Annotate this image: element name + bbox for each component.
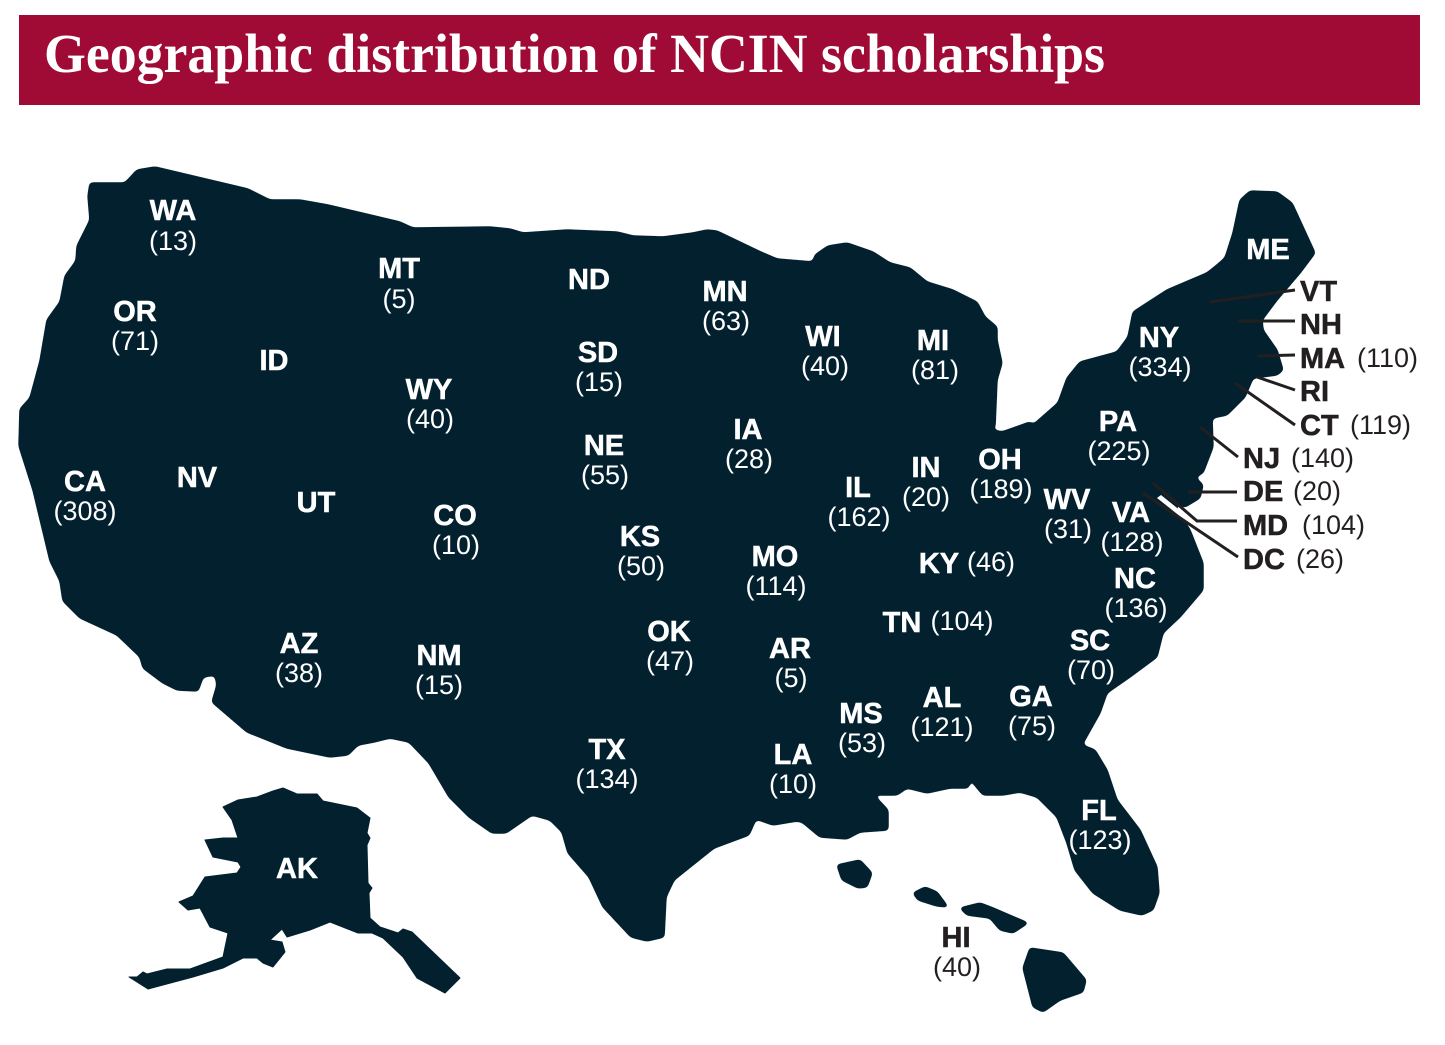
title banner: Geographic distribution of NCIN scholarships: [44, 23, 1105, 84]
label: KY: (46): [967, 547, 1015, 577]
label: LA: (10): [769, 769, 817, 799]
label: DE: (20): [1293, 476, 1341, 506]
label: MT: [378, 253, 420, 314]
label: NV: NV: [177, 462, 218, 494]
label: VA: (128): [1100, 527, 1164, 557]
label: NY: NY: [1139, 322, 1179, 354]
label: NC: [1104, 563, 1168, 623]
label: AR: AR: [769, 633, 811, 665]
label: GA: (75): [1008, 711, 1056, 741]
label: NM: NM: [416, 640, 462, 672]
label: MN: MN: [702, 276, 748, 308]
label: TN: [883, 606, 994, 639]
label: WY: (40): [406, 404, 454, 434]
label: WY: WY: [406, 374, 452, 406]
label: OR: OR: [113, 296, 157, 328]
label: IL: [827, 472, 891, 532]
label: WV: WV: [1044, 484, 1091, 516]
label: SD: SD: [578, 337, 618, 369]
label: AR: (5): [774, 663, 808, 693]
label: GA: GA: [1009, 681, 1053, 713]
map: contiguous United States: [19, 167, 1315, 941]
label: MA: MA: [1300, 343, 1345, 375]
label: NC: NC: [1114, 563, 1156, 595]
label: MI: (81): [911, 355, 959, 385]
label: RI: RI: [1300, 376, 1329, 408]
label: ME: ME: [1246, 234, 1290, 266]
label: FL: [1068, 795, 1132, 855]
label: MI: [911, 325, 959, 385]
label: OK: OK: [647, 616, 691, 648]
label: WI: WI: [805, 321, 841, 353]
label: IL: IL: [845, 472, 871, 504]
label: CO: CO: [433, 500, 477, 532]
label: DC: [1243, 544, 1344, 576]
label: OH: [969, 444, 1033, 504]
label: AR: [769, 633, 811, 693]
label: MI: MI: [917, 325, 949, 357]
label: KS: (50): [617, 551, 665, 581]
label: NE: (55): [581, 460, 629, 490]
label: DC: (26): [1296, 544, 1344, 574]
label: NJ: (140): [1291, 443, 1354, 473]
label: AL: (121): [910, 712, 974, 742]
label: NM: (15): [415, 670, 463, 700]
label: MS: [838, 698, 886, 758]
label: PA: PA: [1099, 406, 1137, 438]
label: HI: (40): [933, 952, 981, 982]
label: MS: MS: [839, 698, 883, 730]
label: IA: IA: [734, 414, 763, 446]
label: FL: (123): [1068, 825, 1132, 855]
label: ND: ND: [568, 264, 610, 296]
label: TN: (104): [930, 606, 994, 636]
label: AK: AK: [276, 853, 318, 885]
label: MN: (63): [702, 306, 750, 336]
label: WI: [801, 321, 849, 381]
label: WV: (31): [1044, 514, 1092, 544]
label: VA: [1100, 497, 1164, 557]
label: WA: (13): [149, 226, 197, 256]
label: IN: [902, 452, 950, 512]
label: CA: [53, 466, 117, 526]
label: MD: MD: [1243, 510, 1288, 542]
label: CT: (119): [1350, 410, 1411, 440]
label: KS: KS: [620, 521, 660, 553]
label: ID: ID: [260, 345, 288, 377]
label: MN: [702, 276, 750, 336]
label: OR: [111, 296, 159, 356]
label: IN: (20): [902, 482, 950, 512]
label: AZ: AZ: [280, 628, 318, 660]
label: MA: (110): [1357, 343, 1418, 373]
label: CA: (308): [53, 496, 117, 526]
label: WA: WA: [150, 195, 196, 227]
label: SD: [575, 337, 623, 397]
label: FL: FL: [1081, 795, 1117, 827]
label: MD: (104): [1302, 510, 1365, 540]
label: IL: (162): [827, 502, 891, 532]
label: NE: NE: [584, 430, 624, 462]
label: TX: (134): [575, 764, 639, 794]
label: NY: [1128, 322, 1192, 382]
label: WV: [1044, 484, 1092, 544]
label: SC: [1067, 625, 1115, 685]
label: AL: [910, 682, 974, 742]
label: OH: OH: [978, 444, 1022, 476]
label: IA: (28): [725, 444, 773, 474]
label: CT: [1300, 410, 1411, 442]
label: WA: [149, 195, 197, 256]
label: MO: [745, 541, 807, 601]
label: KY: KY: [919, 548, 959, 580]
label: WY: [406, 374, 454, 434]
label: NJ: [1243, 443, 1354, 475]
label: HI: [933, 922, 981, 982]
label: MA: [1300, 343, 1418, 375]
label: DE: [1243, 476, 1341, 508]
label: LA: [769, 739, 817, 799]
label: OK: (47): [646, 646, 694, 676]
label: GA: [1008, 681, 1056, 741]
label: IA: [725, 414, 773, 474]
label: KS: [617, 521, 665, 581]
label: NJ: NJ: [1243, 443, 1280, 475]
label: MT: (5): [382, 284, 416, 314]
label: DE: DE: [1243, 476, 1283, 508]
label: OH: (189): [969, 474, 1033, 504]
label: VA: VA: [1112, 497, 1150, 529]
label: NE: [581, 430, 629, 490]
label: WI: (40): [801, 351, 849, 381]
label: SD: (15): [575, 367, 623, 397]
label: DC: DC: [1243, 544, 1285, 576]
map: Alaska: [129, 788, 460, 993]
label: AZ: (38): [275, 658, 323, 688]
label: MS: (53): [838, 728, 886, 758]
icon: Chesapeake Bay gap: [1157, 495, 1197, 525]
label: IN: IN: [912, 452, 940, 484]
label: OR: (71): [111, 326, 159, 356]
label: MT: MT: [378, 253, 420, 285]
label: CA: CA: [64, 466, 106, 498]
label: VT: VT: [1300, 276, 1337, 308]
label: TX: TX: [588, 734, 626, 766]
label: TN: TN: [883, 607, 921, 639]
label: PA: [1087, 406, 1151, 466]
label: MD: [1243, 510, 1365, 542]
label: OK: [646, 616, 694, 676]
label: AL: AL: [923, 682, 961, 714]
label: TX: [575, 734, 639, 794]
map: Hawaii islands: [837, 860, 1086, 1012]
label: MO: MO: [752, 541, 798, 573]
label: UT: UT: [297, 487, 336, 519]
label: LA: LA: [774, 739, 812, 771]
label: NM: [415, 640, 463, 700]
label: CT: CT: [1300, 410, 1339, 442]
label: MO: (114): [745, 571, 807, 601]
label: PA: (225): [1087, 436, 1151, 466]
label: NY: (334): [1128, 352, 1192, 382]
label: CO: [432, 500, 480, 560]
label: AZ: [275, 628, 323, 688]
label: CO: (10): [432, 530, 480, 560]
leader lines for northeastern states: [1143, 290, 1295, 557]
label: NH: NH: [1300, 309, 1342, 341]
label: NC: (136): [1104, 593, 1168, 623]
label: SC: SC: [1070, 625, 1110, 657]
label: HI: HI: [942, 922, 970, 954]
label: SC: (70): [1067, 655, 1115, 685]
title banner: [19, 15, 1420, 105]
label: KY: [919, 547, 1015, 580]
